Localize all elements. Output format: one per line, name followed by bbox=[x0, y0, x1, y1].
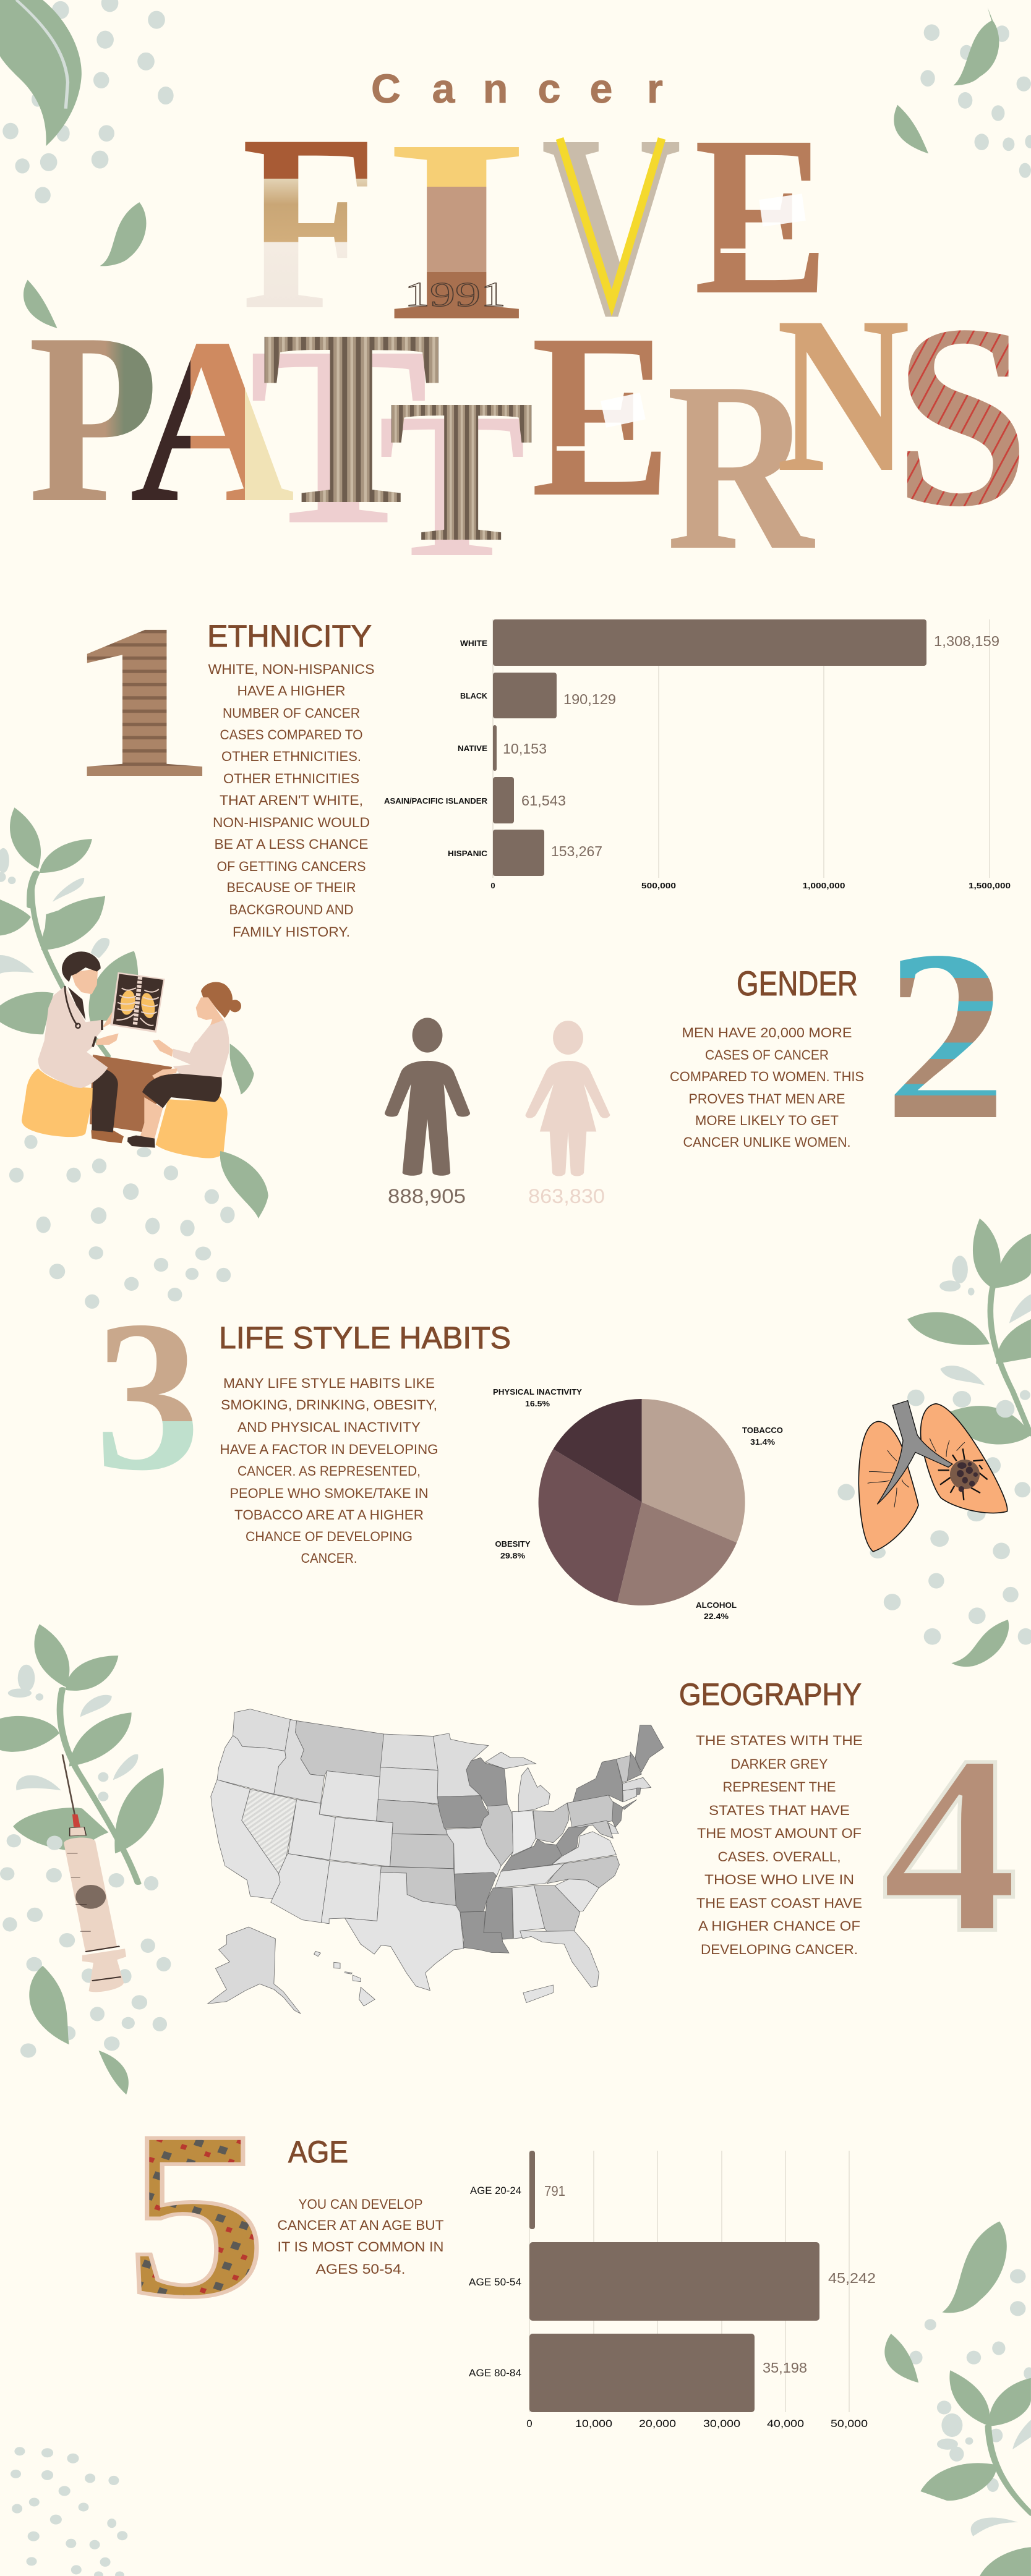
illustration: lungs with tumor bbox=[858, 1401, 1007, 1552]
pie chart: life style factors: 31.4% bbox=[750, 1437, 775, 1447]
decoration: left vine behind doctor scene bbox=[0, 807, 138, 1056]
bar chart: ethnicity cases: 10,153 bbox=[503, 741, 547, 757]
title: PATTERNS collage letters: T bbox=[388, 356, 535, 584]
pie chart: life style factors: OBESITY bbox=[495, 1539, 531, 1549]
section 1: ethnicity bbox=[62, 579, 1011, 940]
text block: ethnicity: BE AT A LESS CHANCE bbox=[214, 836, 369, 852]
title: FIVE collage letters: I bbox=[381, 85, 532, 375]
numeral 3: 3 bbox=[95, 1276, 200, 1515]
numeral 2: 2 bbox=[884, 901, 1007, 1170]
text block: geography bbox=[696, 1733, 863, 1957]
decoration: top right leaves and dots bbox=[894, 7, 1031, 178]
icon: male figure bbox=[385, 1018, 470, 1176]
bar chart: age groups: AGE 20-24 bbox=[470, 2185, 521, 2196]
text block: life style: MANY LIFE STYLE HABITS LIKE bbox=[223, 1375, 435, 1391]
bar chart: age groups: 20,000 bbox=[639, 2418, 676, 2429]
title: Cancer: e bbox=[590, 66, 612, 111]
title: FIVE collage letters bbox=[241, 82, 829, 375]
text block: age: AGES 50-54. bbox=[315, 2261, 406, 2277]
icon: female figure bbox=[525, 1021, 610, 1176]
text block: geography: THE STATES WITH THE bbox=[696, 1733, 863, 1748]
x-ray film bbox=[110, 972, 165, 1033]
pie chart: life style factors bbox=[493, 1387, 783, 1621]
section 2: gender bbox=[385, 901, 1007, 1207]
right pouf bbox=[156, 1096, 228, 1158]
table bbox=[90, 1055, 172, 1133]
title: Cancer bbox=[371, 66, 663, 111]
left lung bbox=[858, 1421, 918, 1552]
title: PATTERNS collage letters: N bbox=[776, 270, 910, 518]
doctor bbox=[38, 951, 124, 1143]
text block: gender: MEN HAVE 20,000 MORE bbox=[682, 1025, 852, 1040]
tumor bbox=[938, 1448, 988, 1500]
title: PATTERNS collage letters: A bbox=[130, 290, 295, 551]
text block: geography: THOSE WHO LIVE IN bbox=[704, 1872, 854, 1887]
right lung bbox=[921, 1404, 1007, 1513]
heading: gender: GENDER bbox=[737, 964, 858, 1003]
bar chart: ethnicity cases: NATIVE bbox=[458, 744, 487, 753]
decoration: top left leaves and dots bbox=[0, 0, 174, 328]
title: PATTERNS collage letters: T bbox=[260, 278, 443, 557]
text block: life style: SMOKING, DRINKING, OBESITY, bbox=[221, 1397, 437, 1413]
text block: gender: COMPARED TO WOMEN. THIS bbox=[670, 1069, 864, 1084]
text block: gender: MORE LIKELY TO GET bbox=[695, 1113, 839, 1128]
bar chart: age groups: 791 bbox=[544, 2183, 565, 2199]
text block: ethnicity: OTHER ETHNICITIES bbox=[223, 771, 359, 786]
text block: gender: PROVES THAT MEN ARE bbox=[689, 1091, 845, 1107]
decoration: left vine and dots around syringe bbox=[0, 1624, 171, 2094]
text block: life style: HAVE A FACTOR IN DEVELOPING bbox=[220, 1442, 438, 1457]
left pouf bbox=[22, 1068, 95, 1137]
bar chart: age groups: 50,000 bbox=[831, 2418, 868, 2429]
title: Cancer: a bbox=[432, 66, 456, 111]
title: Cancer: c bbox=[538, 66, 560, 111]
title: PATTERNS collage letters: R bbox=[666, 333, 816, 601]
decoration: leaf and dots below doctor scene bbox=[9, 1135, 268, 1236]
text block: ethnicity: BACKGROUND AND bbox=[229, 902, 354, 917]
title: FIVE collage letters: E bbox=[694, 89, 829, 342]
bar chart: ethnicity cases: 0 bbox=[490, 881, 495, 890]
heading: ethnicity: ETHNICITY bbox=[207, 619, 372, 653]
text block: geography: DEVELOPING CANCER. bbox=[701, 1942, 858, 1957]
title: Cancer: r bbox=[647, 66, 663, 111]
text block: life style: CANCER. bbox=[301, 1550, 357, 1566]
title: PATTERNS collage letters: T bbox=[249, 293, 429, 579]
text block: geography: THE MOST AMOUNT OF bbox=[697, 1826, 862, 1841]
value: female cases: 863,830 bbox=[528, 1185, 605, 1207]
text block: gender: CANCER UNLIKE WOMEN. bbox=[683, 1134, 851, 1150]
text block: ethnicity: CASES COMPARED TO bbox=[220, 727, 362, 742]
text block: ethnicity: THAT AREN'T WHITE, bbox=[220, 793, 363, 808]
text block: life style: PEOPLE WHO SMOKE/TAKE IN bbox=[230, 1486, 428, 1501]
title: FIVE collage letters: V bbox=[541, 82, 682, 370]
bar chart: age groups: 40,000 bbox=[767, 2418, 804, 2429]
text block: life style: AND PHYSICAL INACTIVITY bbox=[237, 1419, 421, 1435]
text block: ethnicity: NON-HISPANIC WOULD bbox=[213, 815, 370, 830]
bar chart: ethnicity cases: 500,000 bbox=[641, 881, 676, 890]
text block: geography: STATES THAT HAVE bbox=[709, 1803, 850, 1818]
text block: geography: A HIGHER CHANCE OF bbox=[698, 1918, 860, 1934]
illustration: doctor and patient with x-ray bbox=[22, 951, 254, 1158]
bar chart: ethnicity cases: 153,267 bbox=[551, 843, 602, 859]
bar chart: age groups bbox=[469, 2151, 876, 2429]
text block: geography: THE EAST COAST HAVE bbox=[696, 1895, 862, 1911]
text block: life style: TOBACCO ARE AT A HIGHER bbox=[234, 1507, 424, 1523]
patient bbox=[127, 982, 241, 1148]
pie chart: life style factors: 16.5% bbox=[525, 1399, 550, 1408]
dots above numeral 3 bbox=[49, 1246, 231, 1309]
bar chart: age groups: AGE 50-54 bbox=[469, 2276, 521, 2288]
text block: ethnicity: NUMBER OF CANCER bbox=[223, 705, 360, 721]
bar chart: ethnicity cases: ASAIN/PACIFIC ISLANDER bbox=[384, 796, 488, 806]
title: Cancer: C bbox=[371, 66, 401, 111]
section 4: geography bbox=[208, 1677, 1018, 2013]
bar chart: ethnicity cases bbox=[384, 619, 1011, 890]
text block: geography: REPRESENT THE bbox=[722, 1779, 836, 1795]
title: FIVE collage letters: F bbox=[241, 83, 378, 362]
pie chart: life style factors: ALCOHOL bbox=[696, 1600, 737, 1610]
decoration: bottom left dots bbox=[11, 2447, 127, 2576]
bar chart: ethnicity cases: 190,129 bbox=[563, 691, 616, 707]
text block: life style bbox=[220, 1375, 438, 1566]
leaf right of patient bbox=[230, 1044, 254, 1095]
decoration: bottom right vine, leaves and dots bbox=[884, 2201, 1031, 2576]
text block: age: IT IS MOST COMMON IN bbox=[277, 2239, 444, 2255]
pie chart: life style factors: TOBACCO bbox=[742, 1426, 783, 1435]
map: US states shaded by cases bbox=[208, 1709, 664, 2013]
text block: life style: CANCER. AS REPRESENTED, bbox=[237, 1463, 421, 1479]
bar chart: ethnicity cases: BLACK bbox=[460, 691, 488, 700]
trachea bbox=[877, 1401, 952, 1504]
text block: age: CANCER AT AN AGE BUT bbox=[277, 2217, 444, 2233]
bar chart: age groups: 30,000 bbox=[703, 2418, 740, 2429]
bar chart: age groups: 0 bbox=[526, 2418, 533, 2429]
text block: ethnicity: FAMILY HISTORY. bbox=[233, 924, 350, 940]
bar chart: ethnicity cases: 1,000,000 bbox=[803, 881, 845, 890]
bar chart: ethnicity cases: HISPANIC bbox=[448, 849, 488, 858]
numeral 4: 4 bbox=[881, 1702, 1018, 1986]
pie chart: life style factors: 29.8% bbox=[500, 1551, 525, 1560]
text block: life style: CHANCE OF DEVELOPING bbox=[246, 1529, 413, 1544]
title: PATTERNS collage letters: T bbox=[378, 370, 526, 600]
value: male cases: 888,905 bbox=[388, 1185, 466, 1207]
bar chart: age groups: 45,242 bbox=[828, 2270, 876, 2286]
heading: age: AGE bbox=[288, 2135, 348, 2169]
text block: ethnicity: BECAUSE OF THEIR bbox=[226, 880, 356, 895]
illustration: syringe bbox=[62, 1754, 126, 1992]
bar chart: age groups: 35,198 bbox=[763, 2360, 807, 2376]
numeral 5: 5 bbox=[127, 2082, 267, 2347]
title: FIVE collage letters: 1991 bbox=[404, 276, 506, 314]
text block: age bbox=[277, 2196, 444, 2277]
bar chart: age groups: AGE 80-84 bbox=[469, 2367, 521, 2379]
text block: gender bbox=[670, 1025, 864, 1150]
text block: ethnicity bbox=[208, 661, 375, 940]
text block: ethnicity: OTHER ETHNICITIES. bbox=[221, 749, 361, 764]
bar chart: ethnicity cases: 1,308,159 bbox=[934, 633, 999, 649]
bar chart: ethnicity cases: WHITE bbox=[460, 639, 487, 648]
text block: geography: CASES. OVERALL, bbox=[717, 1849, 841, 1864]
text block: gender: CASES OF CANCER bbox=[705, 1047, 829, 1063]
numeral 1: 1 bbox=[62, 579, 218, 823]
heading: life style habits: LIFE STYLE HABITS bbox=[219, 1320, 511, 1355]
text block: ethnicity: HAVE A HIGHER bbox=[237, 683, 345, 699]
text block: geography: DARKER GREY bbox=[731, 1756, 828, 1772]
text block: ethnicity: OF GETTING CANCERS bbox=[216, 859, 366, 874]
bar chart: ethnicity cases: 61,543 bbox=[521, 793, 566, 809]
bar chart: ethnicity cases: 1,500,000 bbox=[969, 881, 1011, 890]
section 3: life style habits bbox=[49, 1246, 1007, 1621]
title: PATTERNS collage letters: P bbox=[28, 284, 158, 553]
decoration: leaf near geography top right bbox=[951, 1600, 1009, 1667]
section 5: age bbox=[127, 2082, 876, 2429]
heading: geography: GEOGRAPHY bbox=[679, 1677, 862, 1712]
title: PATTERNS collage letters bbox=[28, 270, 1030, 601]
title: PATTERNS collage letters: E bbox=[531, 286, 672, 546]
title: Cancer: n bbox=[483, 66, 508, 111]
bar chart: age groups: 10,000 bbox=[575, 2418, 612, 2429]
text block: ethnicity: WHITE, NON-HISPANICS bbox=[208, 661, 375, 677]
pie chart: life style factors: 22.4% bbox=[704, 1612, 729, 1621]
text block: age: YOU CAN DEVELOP bbox=[298, 2196, 423, 2212]
decoration: right vine with dots bbox=[837, 1218, 1031, 1645]
pie chart: life style factors: PHYSICAL INACTIVITY bbox=[493, 1387, 582, 1396]
title: PATTERNS collage letters: S bbox=[894, 271, 1030, 561]
